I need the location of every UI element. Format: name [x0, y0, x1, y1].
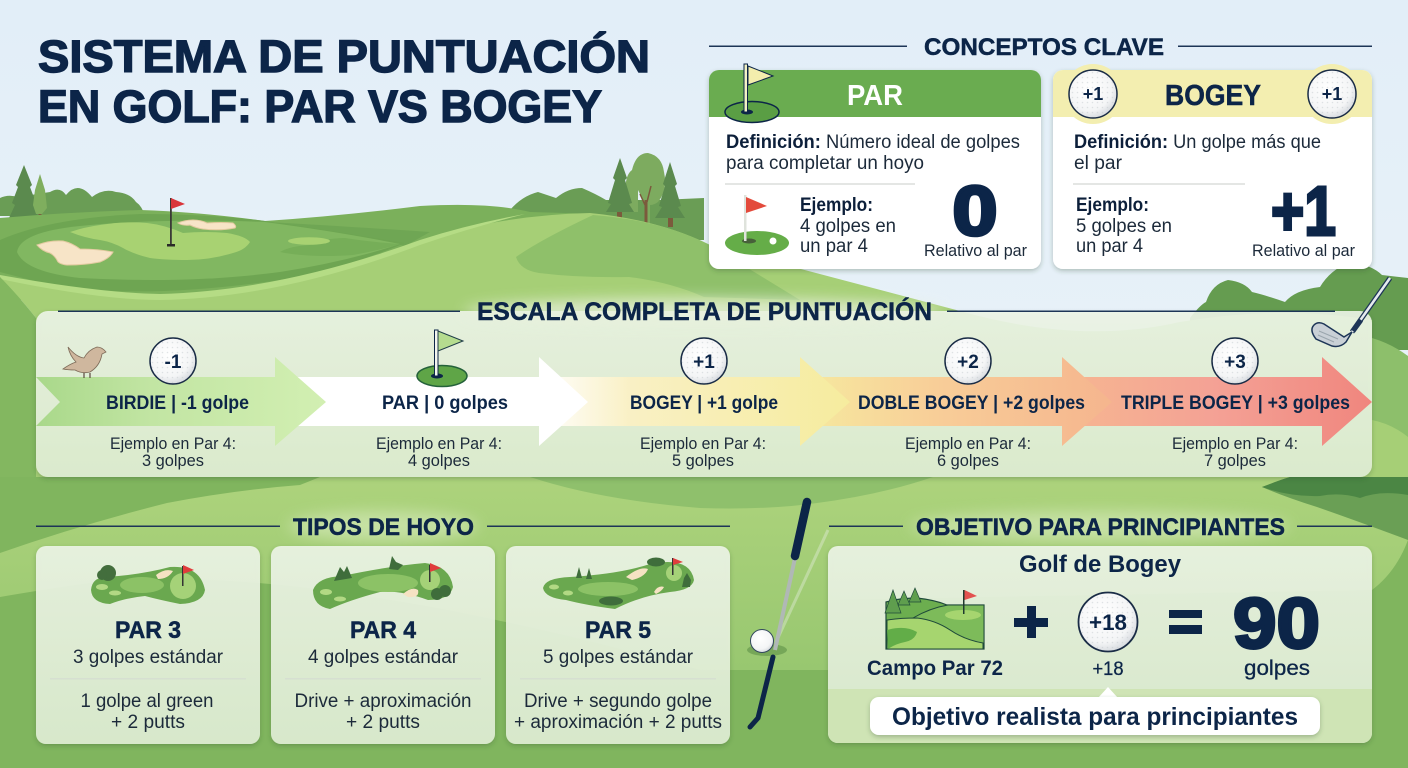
icon: ball +18 [1078, 592, 1138, 652]
panel: par 4: 4 golpes estándar [308, 647, 459, 668]
panel: par 5 [506, 546, 730, 744]
panel: bogey card: Relativo al par [1252, 241, 1355, 260]
panel: par card: Definición: Número ideal de golpes [726, 132, 1020, 153]
panel: bogey card: el par [1074, 153, 1123, 174]
panel: par card: Relativo al par [924, 241, 1027, 260]
heading: escala [58, 296, 1335, 326]
arrow: birdie: BIRDIE | -1 golpe [106, 393, 249, 414]
icon: ball +2 [945, 338, 991, 384]
panel: objetivo: Golf de Bogey [1019, 551, 1182, 578]
panel: objetivo: 90 [1233, 585, 1320, 664]
icon: driver and ball [747, 502, 828, 727]
panel: par card: para completar un hoyo [726, 153, 924, 174]
icon: ball +1 left: +1 [1083, 84, 1103, 104]
arrow: triple bogey [1060, 357, 1372, 446]
panel: par 5: Drive + segundo golpe [524, 691, 712, 712]
panel: par 5: PAR 5 [585, 617, 651, 644]
arrow: triple bogey: TRIPLE BOGEY | +3 golpes [1121, 393, 1350, 414]
lower meadow [0, 477, 1408, 768]
panel: par 5: + aproximación + 2 putts [514, 712, 722, 733]
heading: objetivo [829, 511, 1372, 541]
left tree line [0, 165, 145, 227]
symbol: equals [1169, 610, 1202, 634]
panel: bogey card: un par 4 [1076, 236, 1143, 257]
examples: Ejemplo en Par 4: [376, 434, 502, 453]
arrow: birdie [36, 357, 326, 446]
panel: bogey card: +1 [1271, 172, 1336, 250]
back hill [0, 205, 610, 300]
panel: objetivo: +18 [1092, 659, 1124, 680]
icon: par 5 hole [543, 558, 694, 609]
title [38, 31, 650, 132]
examples: 4 golpes [408, 451, 470, 470]
panel: par card: 4 golpes en [800, 216, 896, 237]
icon: ball +1 [681, 338, 727, 384]
panel: bogey card: Ejemplo: [1076, 195, 1149, 216]
symbol: plus [1014, 606, 1048, 638]
panel: par card: 0 [952, 172, 998, 250]
panel: par 4 [271, 546, 495, 744]
examples: Ejemplo en Par 4: [640, 434, 766, 453]
panel: objetivo [828, 546, 1372, 743]
icon: bird [63, 347, 106, 378]
heading: tipos de hoyo: TIPOS DE HOYO [293, 514, 474, 541]
right bushes [1190, 262, 1408, 350]
icon: ball +2: +2 [957, 352, 979, 373]
title: EN GOLF: PAR VS BOGEY [38, 81, 602, 132]
examples: 3 golpes [142, 451, 204, 470]
arrow: doble bogey [800, 357, 1112, 446]
panel: bogey card: BOGEY [1165, 80, 1261, 112]
panel: objetivo: golpes [1244, 657, 1310, 680]
panel: par card [709, 64, 1041, 269]
icon: flag on green [725, 64, 779, 122]
icon: course par 72 [885, 588, 984, 649]
arrow: bogey [538, 357, 850, 446]
icon: par 4 hole [313, 556, 453, 609]
arrow: doble bogey: DOBLE BOGEY | +2 golpes [858, 393, 1085, 414]
panel: bogey card [1053, 64, 1372, 269]
callout: Objetivo realista para principiantes [892, 703, 1298, 731]
tee area, bunkers and pin [70, 222, 250, 260]
icon: iron club [1312, 278, 1390, 346]
panel: par 3: PAR 3 [115, 617, 181, 644]
panel: objetivo: Campo Par 72 [867, 657, 1003, 680]
icon: ball +3 [1212, 338, 1258, 384]
examples: 7 golpes [1204, 451, 1266, 470]
icon: ball +18: +18 [1089, 610, 1127, 635]
panel: par 3: 3 golpes estándar [73, 647, 224, 668]
heading: escala: ESCALA COMPLETA DE PUNTUACIÓN [477, 296, 932, 326]
fairway sweep [0, 213, 1372, 480]
panel: par 5: 5 golpes estándar [543, 647, 694, 668]
panel: bogey card: Definición: Un golpe más que [1074, 132, 1321, 153]
title: SISTEMA DE PUNTUACIÓN [38, 31, 650, 82]
examples: 6 golpes [937, 451, 999, 470]
panel: par card: PAR [847, 80, 903, 112]
panel: escala completa [36, 296, 1372, 477]
panel: par card: un par 4 [800, 236, 868, 257]
icon: ball -1 [150, 338, 196, 384]
examples: Ejemplo en Par 4: [110, 434, 236, 453]
panel: par 3: + 2 putts [111, 712, 185, 733]
heading: conceptos clave: CONCEPTOS CLAVE [924, 34, 1164, 61]
heading: tipos de hoyo [36, 511, 730, 541]
icon: ball -1: -1 [165, 352, 182, 373]
panel: par 4: PAR 4 [350, 617, 417, 644]
panel: par 4: Drive + aproximación [294, 691, 472, 712]
examples: 5 golpes [672, 451, 734, 470]
icon: flag on green [417, 330, 467, 386]
icon: ball +1 right: +1 [1322, 84, 1342, 104]
panel: par 4: + 2 putts [346, 712, 420, 733]
arrow: par [290, 357, 588, 446]
icon: ball +3: +3 [1224, 352, 1246, 373]
arrow: par: PAR | 0 golpes [382, 393, 508, 414]
callout [870, 687, 1320, 735]
icon: ball +1 right [1308, 70, 1356, 118]
icon: ball +1 left [1069, 70, 1117, 118]
examples: Ejemplo en Par 4: [1172, 434, 1298, 453]
heading: objetivo: OBJETIVO PARA PRINCIPIANTES [916, 514, 1285, 541]
fairway rim [0, 214, 405, 291]
icon: flag on putting green [725, 195, 789, 255]
examples [110, 434, 1298, 470]
examples: Ejemplo en Par 4: [905, 434, 1031, 453]
icon: par 3 hole [91, 565, 205, 604]
right tree line [510, 153, 704, 240]
panel: par card: Ejemplo: [800, 195, 873, 216]
panel: par 3 [36, 546, 260, 744]
arrow: bogey: BOGEY | +1 golpe [630, 393, 778, 414]
icon: ball +1: +1 [693, 352, 715, 373]
panel: par 3: 1 golpe al green [80, 691, 214, 712]
panel: bogey card: 5 golpes en [1076, 216, 1172, 237]
